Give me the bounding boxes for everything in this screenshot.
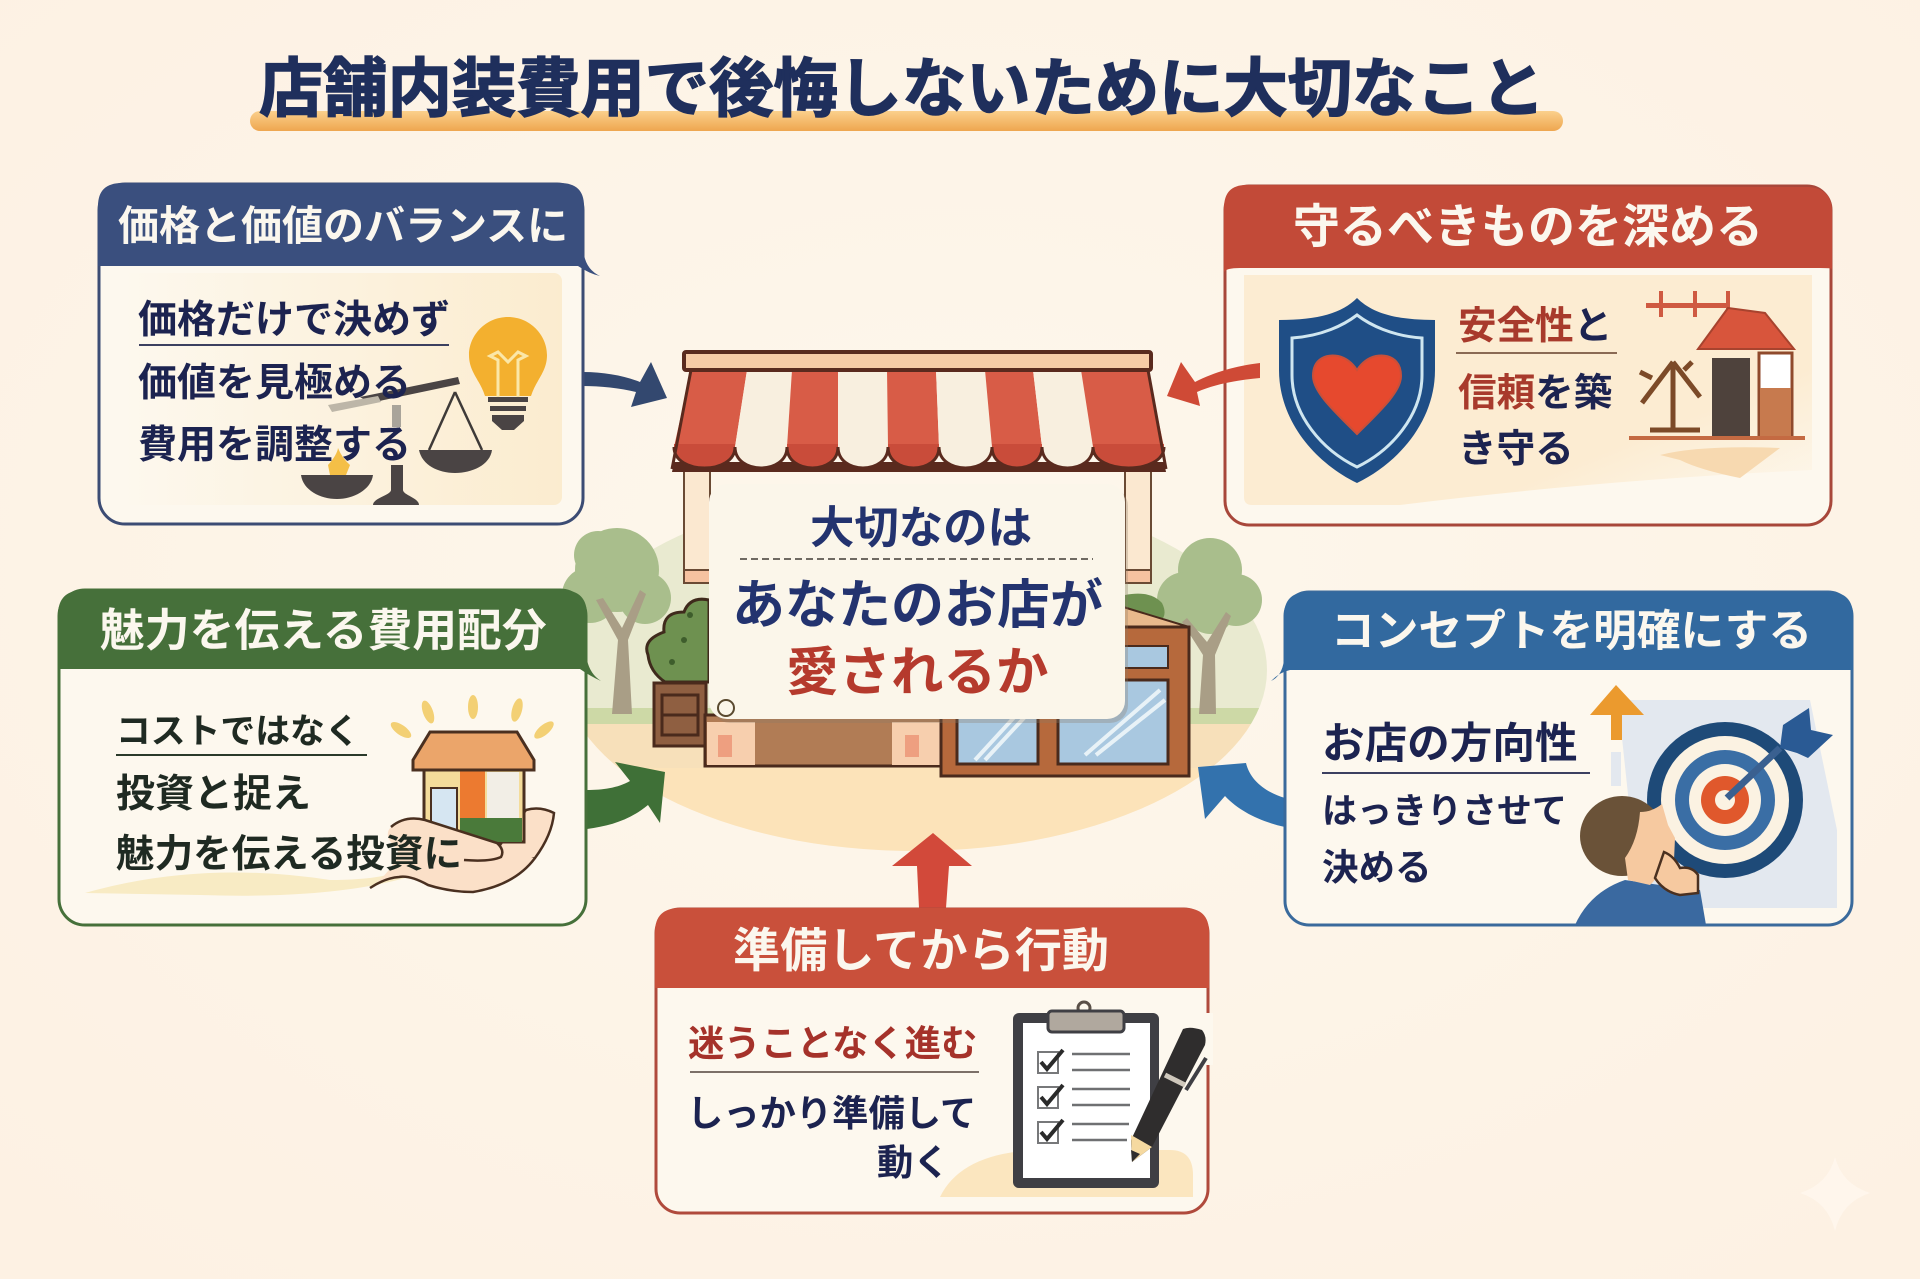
heading: 準備してから行動 — [733, 925, 1109, 978]
arrow: blue from concept — [1198, 763, 1285, 827]
background blob — [940, 1150, 1193, 1197]
arrow: blue to store — [583, 362, 667, 407]
body text: 安全性と — [1458, 305, 1612, 348]
panel: price and value — [98, 183, 600, 524]
arrow: red from bottom panel — [892, 833, 972, 908]
sign board — [709, 484, 1128, 723]
body text: 価値を見極める — [138, 362, 411, 405]
inner swirl — [85, 860, 430, 896]
header — [1271, 592, 1853, 681]
body text: 価格だけで決めず — [138, 299, 450, 342]
sign text line 1: 大切なのは — [810, 504, 1032, 553]
heading: コンセプトを明確にする — [1331, 607, 1812, 656]
sign text line 3: 愛されるか — [786, 643, 1049, 702]
panel: concept — [1271, 592, 1853, 925]
icon: scales — [301, 377, 492, 505]
icon: target and person — [1575, 685, 1837, 925]
arrow: red to store — [1167, 362, 1260, 406]
inner tint — [120, 273, 562, 505]
arrow: green to store — [587, 762, 665, 829]
body text: 費用を調整する — [138, 424, 411, 467]
panel: what to protect: き守る — [1458, 428, 1574, 471]
header — [655, 908, 1209, 988]
tree right — [1157, 538, 1262, 714]
body text: コストではなく — [116, 712, 360, 751]
title underline — [250, 111, 1563, 131]
bush and planter — [647, 599, 709, 746]
panel: what to protect — [1224, 185, 1832, 525]
body text: 魅力を伝える投資に — [116, 833, 462, 876]
icon: house — [1629, 291, 1805, 478]
header — [1224, 185, 1832, 272]
icon: clipboard — [1013, 1002, 1159, 1188]
icon: shield — [1279, 298, 1435, 483]
body text: はっきりさせて — [1322, 792, 1567, 831]
inner tint — [1244, 275, 1812, 505]
sign text line 2: あなたのお店が — [732, 576, 1103, 635]
icon: pen — [1131, 1013, 1213, 1162]
body text: 決める — [1322, 847, 1432, 888]
panel: prepare — [655, 908, 1213, 1213]
heading: 価格と価値のバランスに — [118, 203, 568, 249]
body text — [138, 299, 450, 467]
heading: 守るべきものを深める — [1293, 200, 1763, 253]
pillars — [684, 470, 1151, 583]
ground ellipse — [588, 534, 1267, 851]
store lower wall — [705, 715, 945, 766]
title text: 店舗内装費用で後悔しないために大切なこと — [259, 53, 1545, 125]
panel: prepare: しっかり準備して — [687, 1093, 976, 1134]
store right wing — [941, 606, 1189, 776]
central store illustration — [560, 352, 1270, 854]
panel: prepare: 動く — [877, 1142, 950, 1183]
body text: 迷うことなく進む — [688, 1023, 977, 1064]
icon: house in hand — [370, 695, 556, 892]
awning — [672, 352, 1166, 472]
header — [58, 590, 601, 681]
body text — [1322, 720, 1578, 888]
sparkle watermark — [1800, 1157, 1870, 1231]
tree left — [562, 528, 671, 714]
panel: allocation — [58, 590, 601, 925]
bush right — [1125, 594, 1165, 622]
title — [250, 53, 1563, 131]
icon: light bulb — [469, 317, 547, 430]
header — [98, 183, 600, 276]
body text: お店の方向性 — [1322, 720, 1578, 768]
body text — [116, 712, 462, 876]
body text: 投資と捉え — [116, 773, 311, 816]
heading: 魅力を伝える費用配分 — [100, 606, 547, 656]
panel: what to protect: 信頼を築 — [1458, 372, 1612, 415]
